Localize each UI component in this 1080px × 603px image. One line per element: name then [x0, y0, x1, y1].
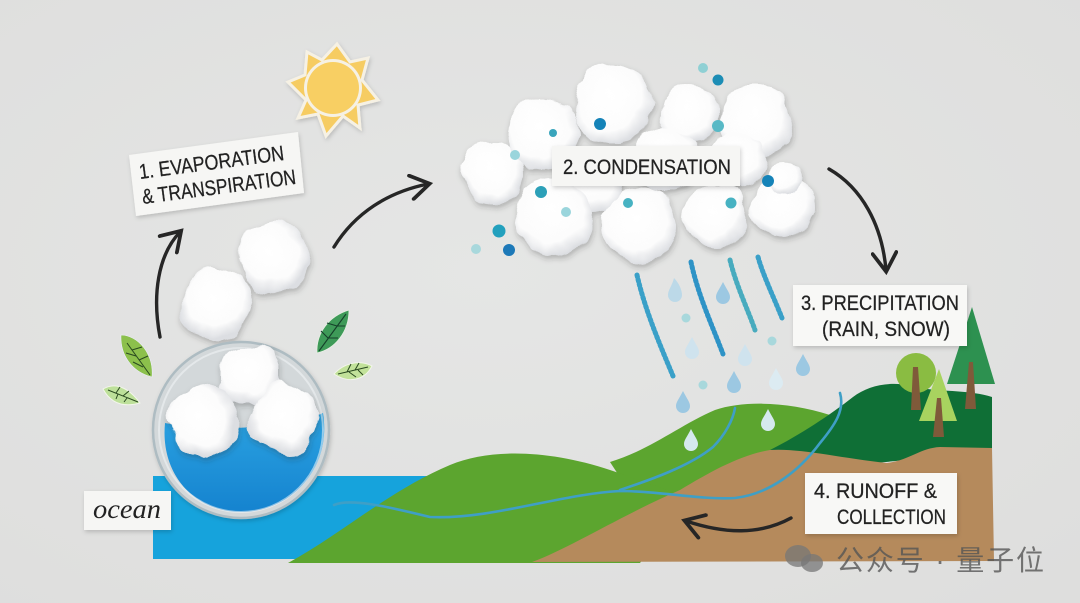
label: condensation: 2. CONDENSATION — [563, 156, 731, 179]
label: ocean: ocean — [93, 494, 161, 524]
label: precipitation — [793, 285, 967, 346]
label: condensation — [552, 146, 740, 186]
watermark: 公众号 · 量子位 — [836, 545, 1044, 576]
label: runoff and collection: COLLECTION — [837, 506, 946, 529]
label: evaporation and transpiration: 1. EVAPORATION — [138, 142, 285, 184]
rising cotton puffs — [172, 217, 315, 348]
arrow: to condensation — [334, 184, 428, 247]
arrow: to precipitation — [829, 169, 886, 270]
icon: leaves — [103, 310, 372, 405]
petri dish with water and cotton — [153, 342, 329, 518]
label: ocean — [84, 491, 171, 530]
label: precipitation: 3. PRECIPITATION — [801, 292, 959, 315]
rain: beaded strands — [637, 257, 782, 376]
label: precipitation: (RAIN, SNOW) — [822, 318, 950, 341]
landscape: felt hills — [288, 384, 994, 563]
label: evaporation and transpiration: & TRANSPIRATION — [141, 166, 297, 209]
cloud of cotton — [461, 64, 813, 262]
sequins on cloud — [471, 63, 774, 256]
streams — [334, 393, 841, 517]
arrow: evaporation rising — [157, 232, 180, 337]
icon: paper sun — [288, 44, 378, 136]
arrow: runoff to ocean — [686, 518, 791, 531]
label: evaporation and transpiration — [129, 132, 304, 216]
trees — [896, 307, 995, 437]
label: runoff and collection — [805, 473, 957, 534]
label: runoff and collection: 4. RUNOFF & — [814, 480, 937, 503]
raindrops — [668, 278, 810, 451]
ocean paper — [153, 476, 440, 559]
